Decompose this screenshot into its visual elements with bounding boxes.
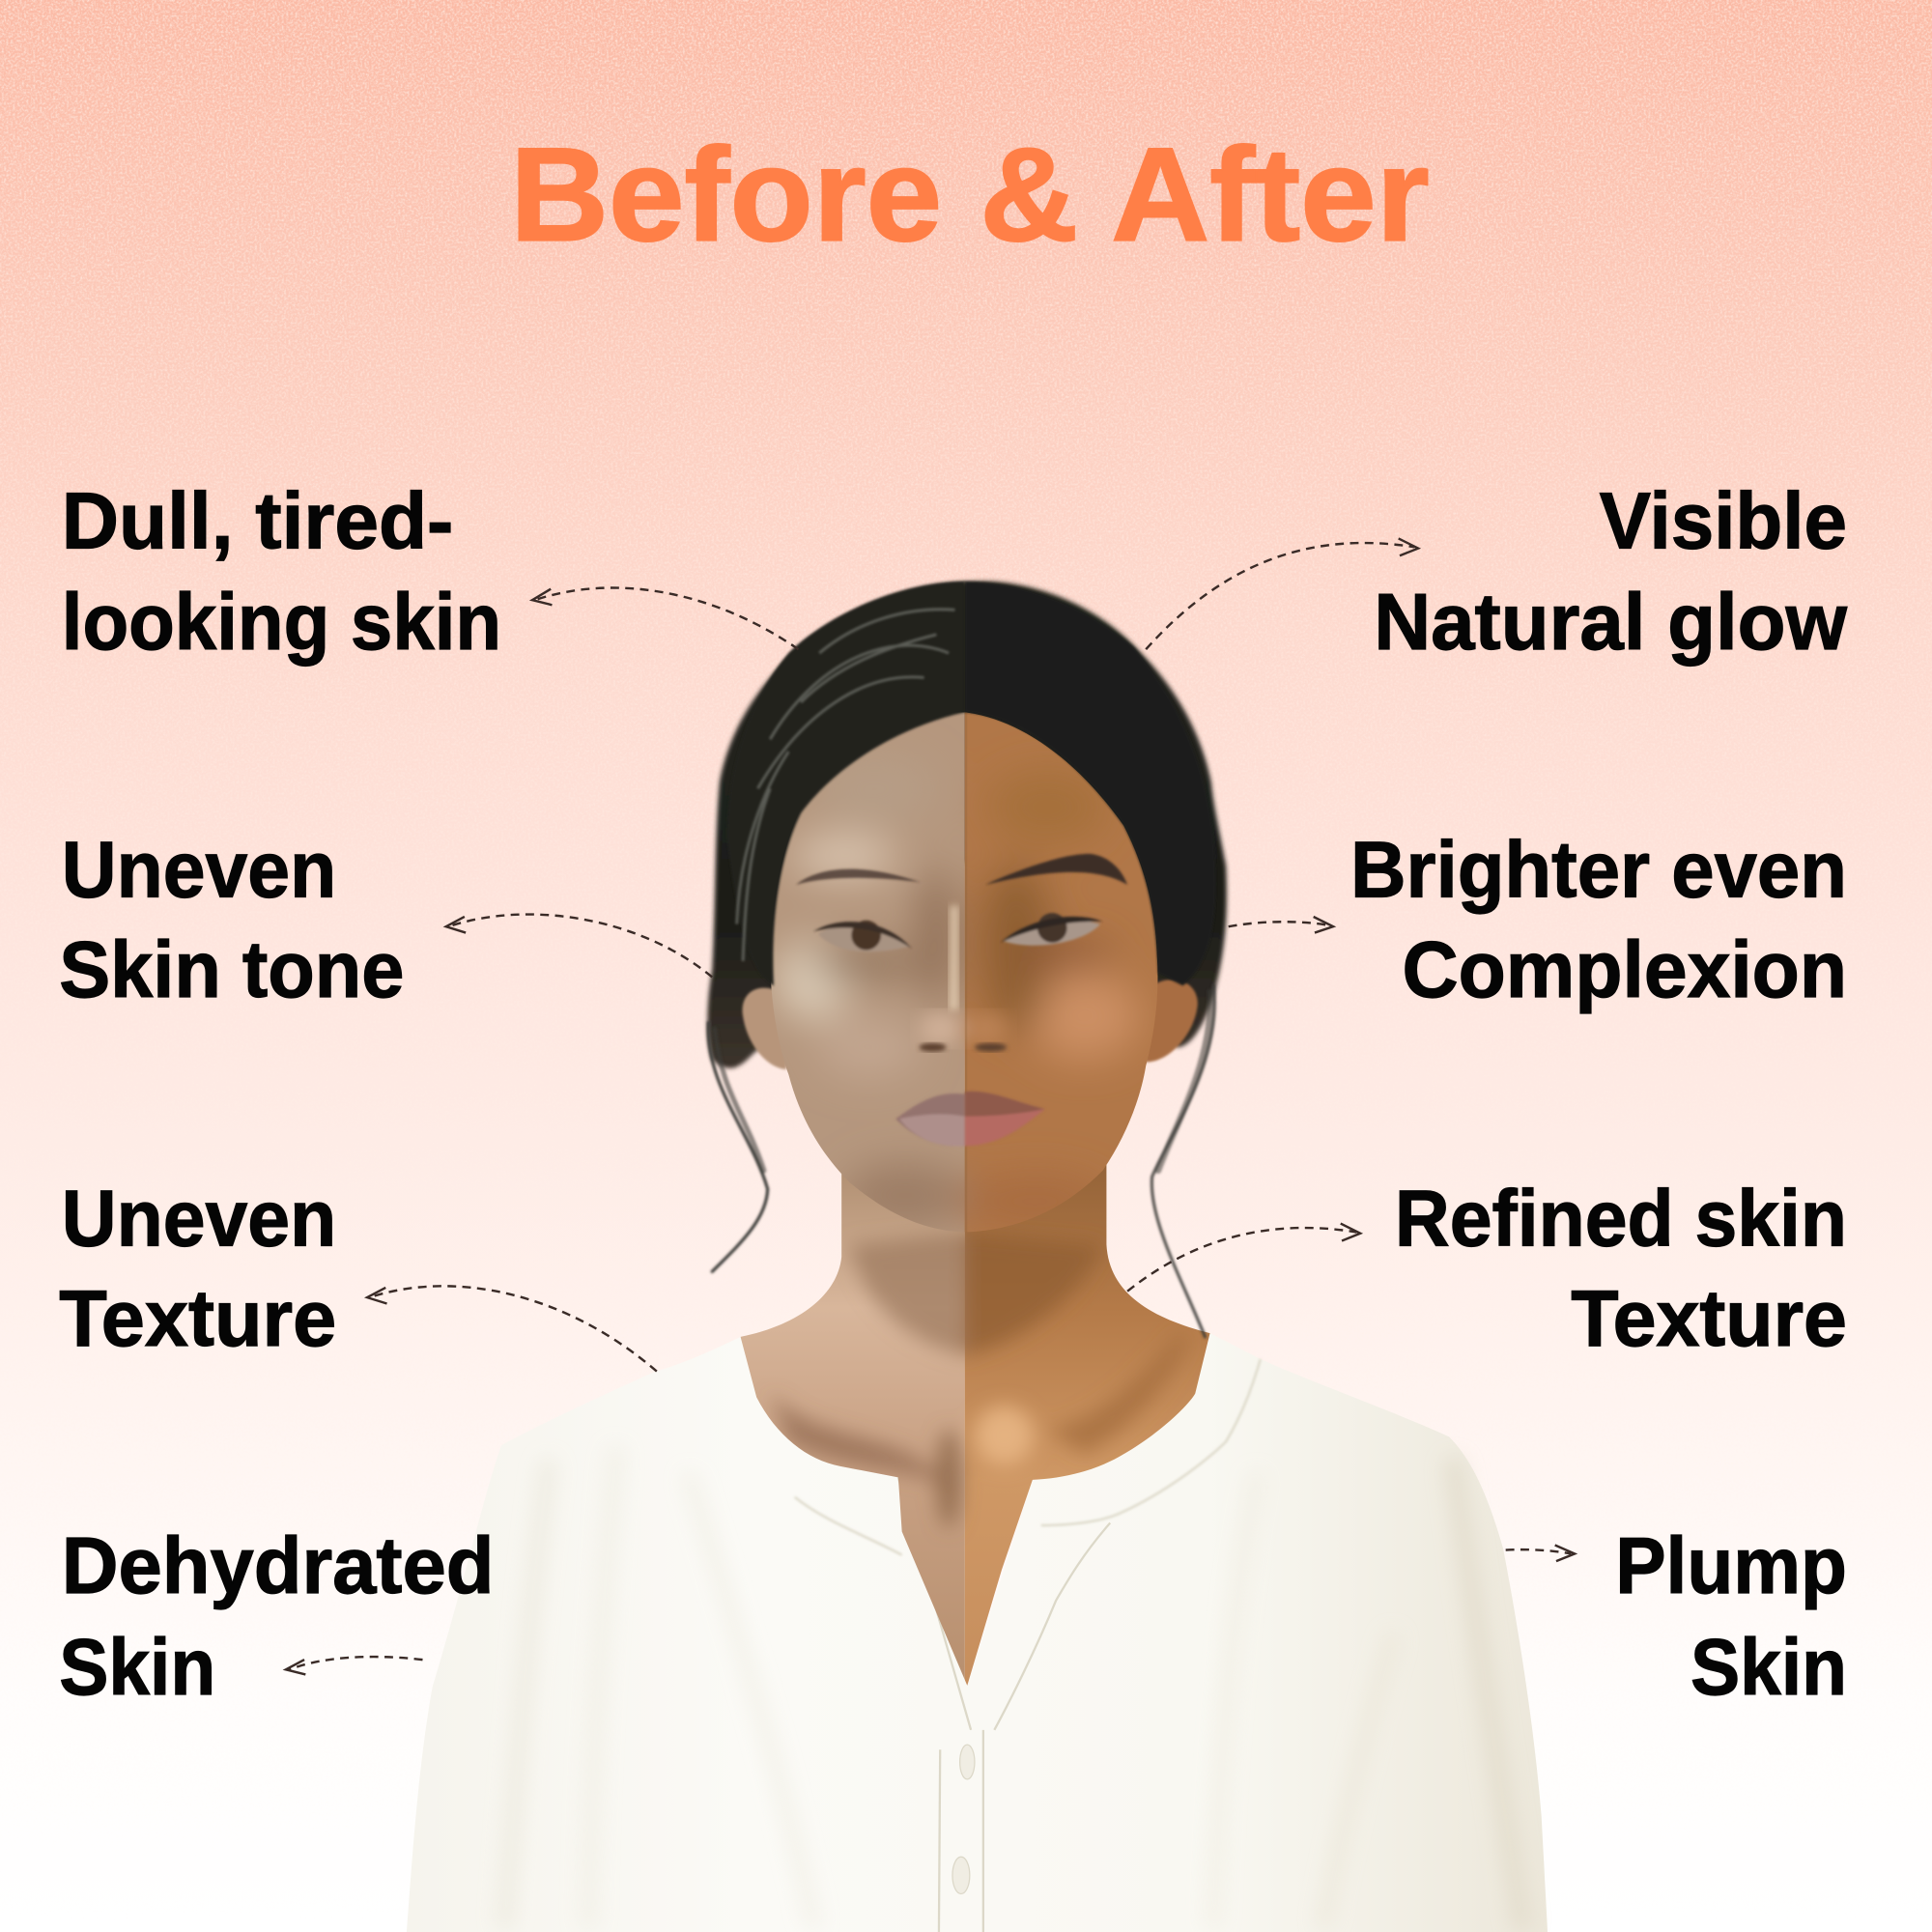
loose hair strands	[708, 985, 1214, 1337]
label: brighter complexion: Brighter even	[1350, 825, 1847, 915]
hair front strands	[727, 582, 1216, 985]
arrow	[1146, 538, 1418, 649]
eyebrows	[796, 854, 1127, 885]
label: plump skin	[1615, 1520, 1847, 1712]
title: Before & After	[510, 121, 1430, 270]
label: refined texture	[1395, 1174, 1847, 1363]
label: dehydrated skin: Dehydrated	[62, 1520, 494, 1610]
label: dull skin: Dull, tired-	[62, 476, 453, 566]
label: dehydrated skin	[59, 1520, 494, 1712]
neck and chest	[740, 1146, 1209, 1686]
ears	[743, 980, 1198, 1069]
nose	[920, 1043, 1007, 1052]
callout right 3	[1127, 1174, 1847, 1363]
label: natural glow	[1374, 476, 1848, 667]
arrow	[1127, 1224, 1360, 1292]
divider line shade on right half edge	[965, 712, 967, 1233]
callout left 2	[59, 825, 712, 1014]
arrow	[1229, 917, 1333, 933]
arrow	[446, 915, 712, 977]
label: dull skin: looking skin	[62, 577, 501, 667]
label: refined texture: Texture	[1571, 1273, 1847, 1363]
face	[771, 712, 1157, 1233]
callout right 1	[1146, 476, 1848, 667]
hair back	[707, 582, 1227, 1068]
label: uneven texture: Uneven	[62, 1174, 336, 1264]
arrow	[286, 1657, 423, 1674]
arrow	[532, 587, 799, 649]
label: dehydrated skin: Skin	[59, 1622, 215, 1712]
collar and placket	[795, 1359, 1261, 1932]
portrait: split-face woman in white shirt	[407, 582, 1548, 1932]
label: plump skin: Plump	[1615, 1520, 1847, 1610]
label: brighter complexion	[1350, 825, 1847, 1014]
nose tip shading	[920, 1011, 1008, 1046]
label: uneven skin tone: Uneven	[62, 825, 336, 915]
label: natural glow: Visible	[1600, 476, 1847, 566]
label: dull skin	[62, 476, 501, 667]
eyes	[813, 913, 1103, 952]
callout right 4	[1506, 1520, 1847, 1712]
label: uneven skin tone: Skin tone	[59, 924, 404, 1014]
label: uneven texture	[59, 1174, 336, 1363]
callout left 4	[59, 1520, 494, 1712]
arrow	[1506, 1545, 1575, 1561]
callout right 2	[1229, 825, 1847, 1014]
callout left 1	[62, 476, 799, 667]
label: refined texture: Refined skin	[1395, 1174, 1847, 1264]
label: uneven skin tone	[59, 825, 404, 1014]
label: uneven texture: Texture	[59, 1273, 336, 1363]
label: brighter complexion: Complexion	[1403, 924, 1847, 1014]
label: natural glow: Natural glow	[1374, 577, 1848, 667]
shirt	[407, 1333, 1548, 1932]
callout left 3	[59, 1174, 657, 1372]
lips	[895, 1092, 1045, 1147]
arrow	[367, 1286, 657, 1372]
label: plump skin: Skin	[1690, 1622, 1847, 1712]
